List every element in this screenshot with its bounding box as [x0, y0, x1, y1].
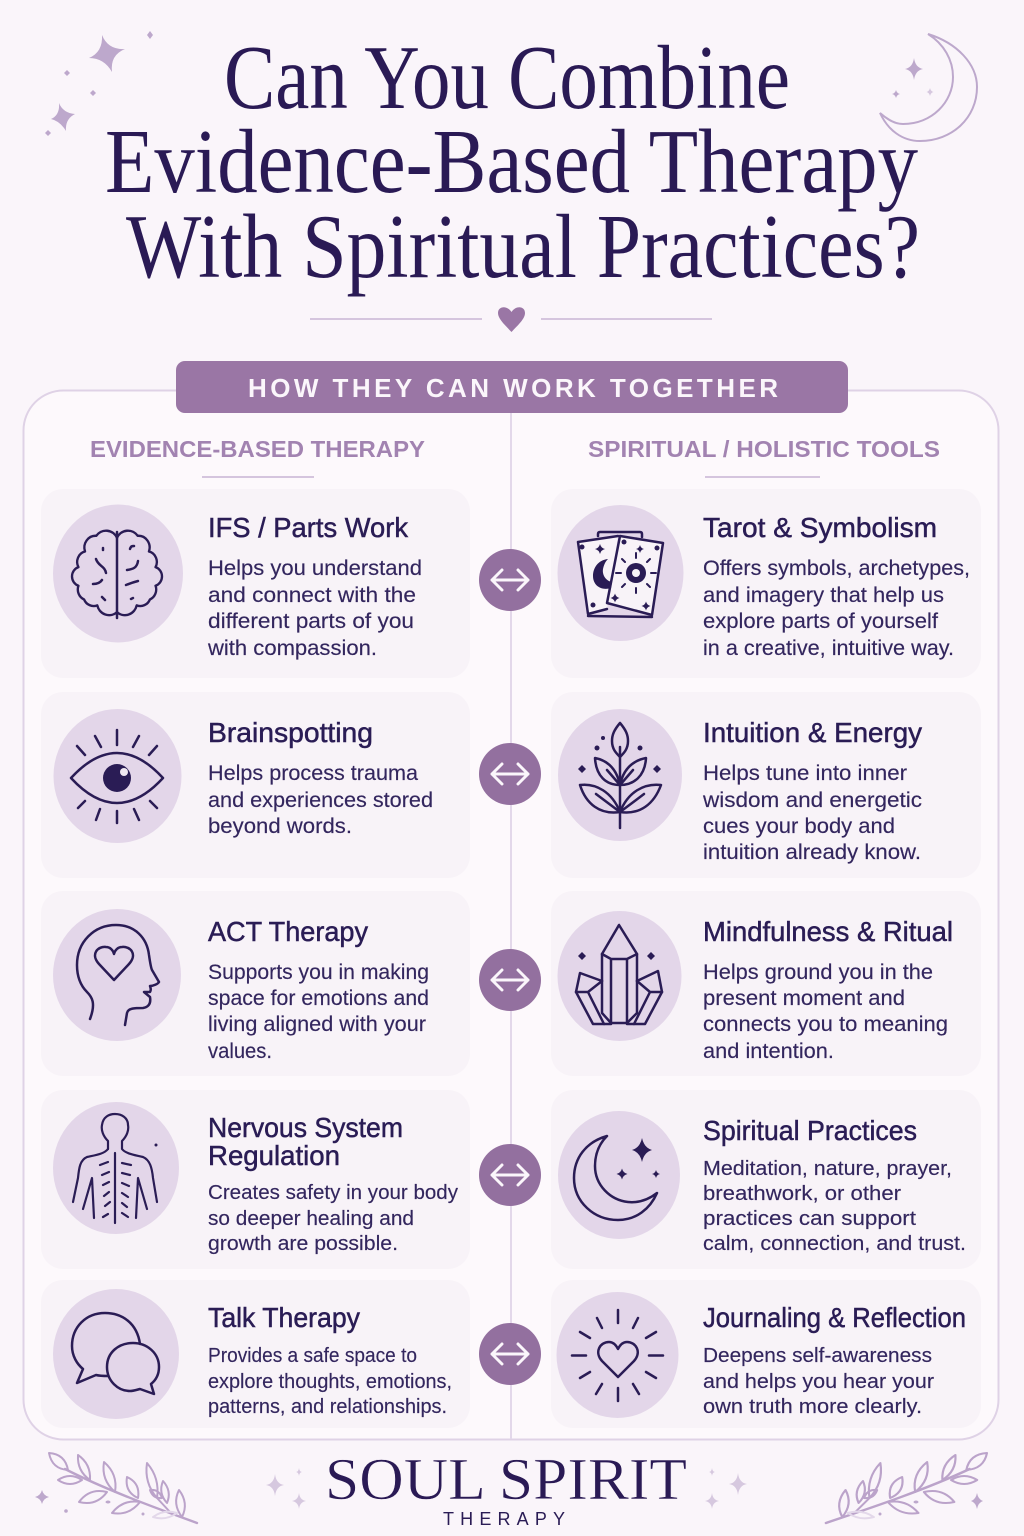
heading: Spiritual Practices: [703, 1115, 917, 1146]
description: explore parts of yourself: [703, 610, 938, 633]
panel: Nervous System Regulation: [41, 1090, 470, 1269]
description: and helps you hear your: [703, 1371, 934, 1393]
arrow: row 2: [479, 743, 541, 805]
description: Helps process trauma: [208, 762, 418, 785]
description: Provides a safe space to: [208, 1345, 417, 1367]
description: and intention.: [703, 1040, 834, 1063]
heading: Regulation: [208, 1140, 340, 1171]
icon: speech bubbles: [53, 1289, 179, 1419]
icon: plant: [558, 709, 682, 841]
icon: eye: [54, 709, 182, 843]
icon: moon and stars: [558, 1111, 680, 1239]
description: Helps tune into inner: [703, 762, 907, 785]
description: [703, 1345, 934, 1418]
description: beyond words.: [208, 815, 352, 838]
panel: Mindfulness & Ritual: [551, 891, 981, 1076]
icon: radiant heart: [556, 1292, 678, 1418]
description: practices can support: [703, 1208, 916, 1230]
icon: tarot cards: [558, 505, 684, 641]
heading: IFS / Parts Work: [208, 512, 409, 543]
icon: brain: [53, 504, 183, 642]
description: different parts of you: [208, 610, 414, 633]
description: present moment and: [703, 987, 905, 1010]
column heading: spiritual / holistic tools: SPIRITUAL / HOLISTIC TOOLS: [588, 436, 940, 462]
description: cues your body and: [703, 815, 895, 838]
logo: Soul Spirit Therapy: SOUL SPIRIT: [325, 1446, 687, 1512]
description: space for emotions and: [208, 987, 429, 1010]
description: [208, 762, 433, 838]
description: explore thoughts, emotions,: [208, 1371, 452, 1393]
title: [105, 27, 920, 297]
outer panel: [24, 390, 998, 1440]
heading: Talk Therapy: [208, 1302, 360, 1333]
arrow: row 5: [479, 1323, 541, 1385]
heading: ACT Therapy: [208, 916, 368, 947]
heading: Journaling & Reflection: [703, 1302, 966, 1333]
description: Offers symbols, archetypes,: [703, 557, 970, 580]
decorative stars top left: [45, 31, 153, 136]
banner: how they can work together: [176, 361, 848, 413]
description: [703, 557, 970, 660]
description: Creates safety in your body: [208, 1182, 458, 1204]
description: values.: [208, 1040, 272, 1063]
column heading: evidence-based therapy: EVIDENCE-BASED THERAPY: [90, 436, 425, 462]
logo: Soul Spirit Therapy: THERAPY: [443, 1509, 565, 1529]
description: and connect with the: [208, 584, 416, 607]
description: growth are possible.: [208, 1233, 398, 1255]
arrow: row 1: [479, 549, 541, 611]
arrow: row 4: [479, 1144, 541, 1206]
heading: Intuition & Energy: [703, 717, 922, 748]
description: Meditation, nature, prayer,: [703, 1158, 952, 1180]
description: [703, 1158, 966, 1255]
description: [208, 961, 429, 1063]
icon: crystals: [558, 911, 682, 1041]
description: Deepens self-awareness: [703, 1345, 932, 1367]
description: with compassion.: [207, 637, 377, 660]
panel: Brainspotting: [41, 692, 470, 878]
arrow: row 3: [479, 949, 541, 1011]
description: living aligned with your: [208, 1013, 426, 1036]
description: patterns, and relationships.: [208, 1396, 447, 1418]
heading: [208, 1112, 403, 1171]
description: [703, 961, 948, 1063]
heading: Brainspotting: [208, 717, 373, 748]
description: calm, connection, and trust.: [703, 1233, 966, 1255]
description: connects you to meaning: [703, 1013, 948, 1036]
decorative sprig: left: [49, 1453, 197, 1523]
description: breathwork, or other: [703, 1183, 901, 1205]
title: Can You Combine: [224, 27, 790, 128]
description: [208, 1182, 458, 1255]
description: [207, 557, 422, 660]
description: own truth more clearly.: [703, 1396, 922, 1418]
title: Evidence-Based Therapy: [105, 111, 918, 212]
description: in a creative, intuitive way.: [703, 637, 954, 660]
panel: Intuition & Energy: [551, 692, 981, 878]
description: wisdom and energetic: [702, 789, 922, 812]
panel: Spiritual Practices: [551, 1090, 981, 1269]
decorative sparkles: footer: [266, 1468, 983, 1516]
description: Helps ground you in the: [703, 961, 933, 984]
description: intuition already know.: [703, 841, 921, 864]
icon: body with spine: [53, 1102, 179, 1234]
heading: Tarot & Symbolism: [703, 512, 937, 543]
panel: Journaling & Reflection: [551, 1280, 981, 1428]
panel: IFS / Parts Work: [41, 489, 470, 678]
description: [208, 1345, 452, 1418]
decorative sprig: right: [826, 1453, 987, 1523]
panel: Talk Therapy: [41, 1280, 470, 1428]
heart divider: [310, 307, 712, 332]
heading: Mindfulness & Ritual: [703, 916, 953, 947]
description: and imagery that help us: [703, 584, 944, 607]
title: With Spiritual Practices?: [126, 196, 920, 297]
description: [702, 762, 922, 864]
description: Supports you in making: [208, 961, 429, 984]
decorative sparkles: left sprig: [35, 1490, 144, 1516]
description: so deeper healing and: [208, 1208, 414, 1230]
description: and experiences stored: [208, 789, 433, 812]
banner: how they can work together: HOW THEY CAN WORK TOGETHER: [248, 373, 778, 403]
heading: Nervous System: [208, 1112, 403, 1143]
icon: head with heart: [53, 909, 181, 1041]
panel: ACT Therapy: [41, 891, 470, 1076]
description: Helps you understand: [208, 557, 422, 580]
icon: crescent moon with stars: [880, 34, 977, 141]
panel: Tarot & Symbolism: [551, 489, 981, 678]
